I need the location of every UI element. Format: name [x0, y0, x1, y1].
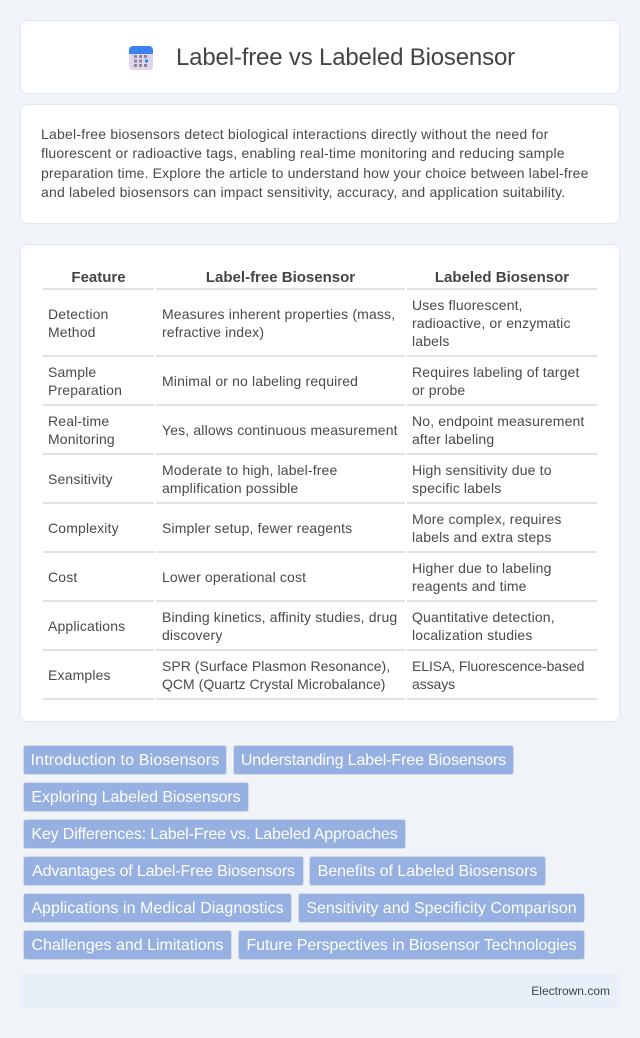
row: real-time monitoring	[43, 413, 597, 455]
row: examples: ELISA, Fluorescence-based	[412, 658, 584, 674]
row: sample preparation: Requires labeling of target	[412, 364, 579, 380]
tag	[23, 819, 406, 849]
row: applications: discovery	[162, 627, 222, 643]
row: detection method: labels	[412, 333, 449, 349]
row: detection method: Uses fluorescent,	[412, 297, 523, 313]
row: detection method	[43, 297, 597, 357]
tag	[23, 856, 304, 886]
row: complexity: Complexity	[48, 520, 119, 536]
row: sensitivity: Sensitivity	[48, 471, 113, 487]
row: cost: Higher due to labeling	[412, 560, 552, 576]
row: sensitivity: specific labels	[412, 480, 501, 496]
intro text: fluorescent or radioactive tags, enabling real-time monitoring and reducing sample	[41, 145, 565, 161]
tag: Advantages of Label-Free Biosensors	[32, 863, 295, 880]
tag	[233, 745, 514, 775]
comparison table panel	[20, 244, 620, 722]
row: examples: Examples	[48, 667, 111, 683]
row: detection method: Method	[48, 324, 96, 340]
footer	[20, 974, 620, 1008]
row: cost: Lower operational cost	[162, 569, 306, 585]
tag	[238, 930, 585, 960]
table header: Label-free Biosensor	[206, 269, 355, 286]
row: sensitivity	[43, 462, 597, 504]
row: cost: reagents and time	[412, 578, 527, 594]
row: examples: assays	[412, 676, 455, 692]
row: examples	[43, 658, 597, 700]
tag	[23, 893, 292, 923]
tag	[298, 893, 585, 923]
row: sample preparation	[43, 364, 597, 406]
tag: Applications in Medical Diagnostics	[31, 900, 284, 917]
row: sample preparation: or probe	[412, 382, 465, 398]
row: applications	[43, 609, 597, 651]
row: complexity: More complex, requires	[412, 511, 562, 527]
tag: Challenges and Limitations	[31, 937, 224, 954]
tag: Future Perspectives in Biosensor Technologies	[246, 937, 577, 954]
row: detection method: refractive index)	[162, 324, 264, 340]
table header: Labeled Biosensor	[435, 269, 569, 286]
table header	[43, 269, 597, 290]
tag	[23, 745, 227, 775]
row: cost: Cost	[48, 569, 77, 585]
comparison table	[43, 269, 597, 700]
row: sample preparation: Minimal or no labeling required	[162, 373, 358, 389]
table header: Feature	[71, 269, 126, 286]
topic tags	[23, 745, 585, 960]
row: real-time monitoring: Monitoring	[48, 431, 115, 447]
intro text: Label-free biosensors detect biological interactions directly without the need for	[41, 126, 549, 142]
row: cost	[43, 560, 597, 602]
row: sample preparation: Sample	[48, 364, 96, 380]
tag: Introduction to Biosensors	[31, 752, 219, 769]
row: sensitivity: amplification possible	[162, 480, 298, 496]
row: examples: QCM (Quartz Crystal Microbalance)	[162, 676, 385, 692]
tag	[23, 930, 232, 960]
intro text: and labeled biosensors can impact sensitivity, accuracy, and application suitability.	[41, 184, 565, 200]
intro text: preparation time. Explore the article to understand how your choice between label-free	[41, 165, 589, 181]
row: real-time monitoring: Yes, allows continuous measurement	[162, 422, 398, 438]
icon: calendar grid	[129, 46, 153, 70]
tag: Exploring Labeled Biosensors	[31, 789, 241, 806]
row: detection method: Detection	[48, 306, 108, 322]
tag	[309, 856, 546, 886]
tag	[23, 782, 249, 812]
row: applications: Binding kinetics, affinity studies, drug	[162, 609, 397, 625]
tag: Understanding Label-Free Biosensors	[241, 752, 506, 769]
row: applications: Applications	[48, 618, 125, 634]
row: complexity	[43, 511, 597, 553]
footer credit: Electrown.com	[531, 984, 610, 998]
row: examples: SPR (Surface Plasmon Resonance),	[162, 658, 390, 674]
intro panel	[20, 104, 620, 224]
tag: Key Differences: Label-Free vs. Labeled Approaches	[31, 826, 398, 843]
title: Label-free vs Labeled Biosensor	[176, 44, 515, 71]
tag: Sensitivity and Specificity Comparison	[306, 900, 577, 917]
header panel	[20, 20, 620, 94]
tag: Benefits of Labeled Biosensors	[318, 863, 537, 880]
row: sensitivity: High sensitivity due to	[412, 462, 552, 478]
row: sensitivity: Moderate to high, label-free	[162, 462, 337, 478]
intro text	[41, 126, 589, 200]
row: real-time monitoring: after labeling	[412, 431, 494, 447]
row: real-time monitoring: Real-time	[48, 413, 109, 429]
row: detection method: radioactive, or enzymatic	[412, 315, 571, 331]
row: real-time monitoring: No, endpoint measurement	[412, 413, 584, 429]
row: detection method: Measures inherent properties (mass,	[162, 306, 395, 322]
row: applications: Quantitative detection,	[412, 609, 555, 625]
row: applications: localization studies	[412, 627, 533, 643]
row: complexity: Simpler setup, fewer reagents	[162, 520, 352, 536]
row: complexity: labels and extra steps	[412, 529, 552, 545]
row: sample preparation: Preparation	[48, 382, 122, 398]
